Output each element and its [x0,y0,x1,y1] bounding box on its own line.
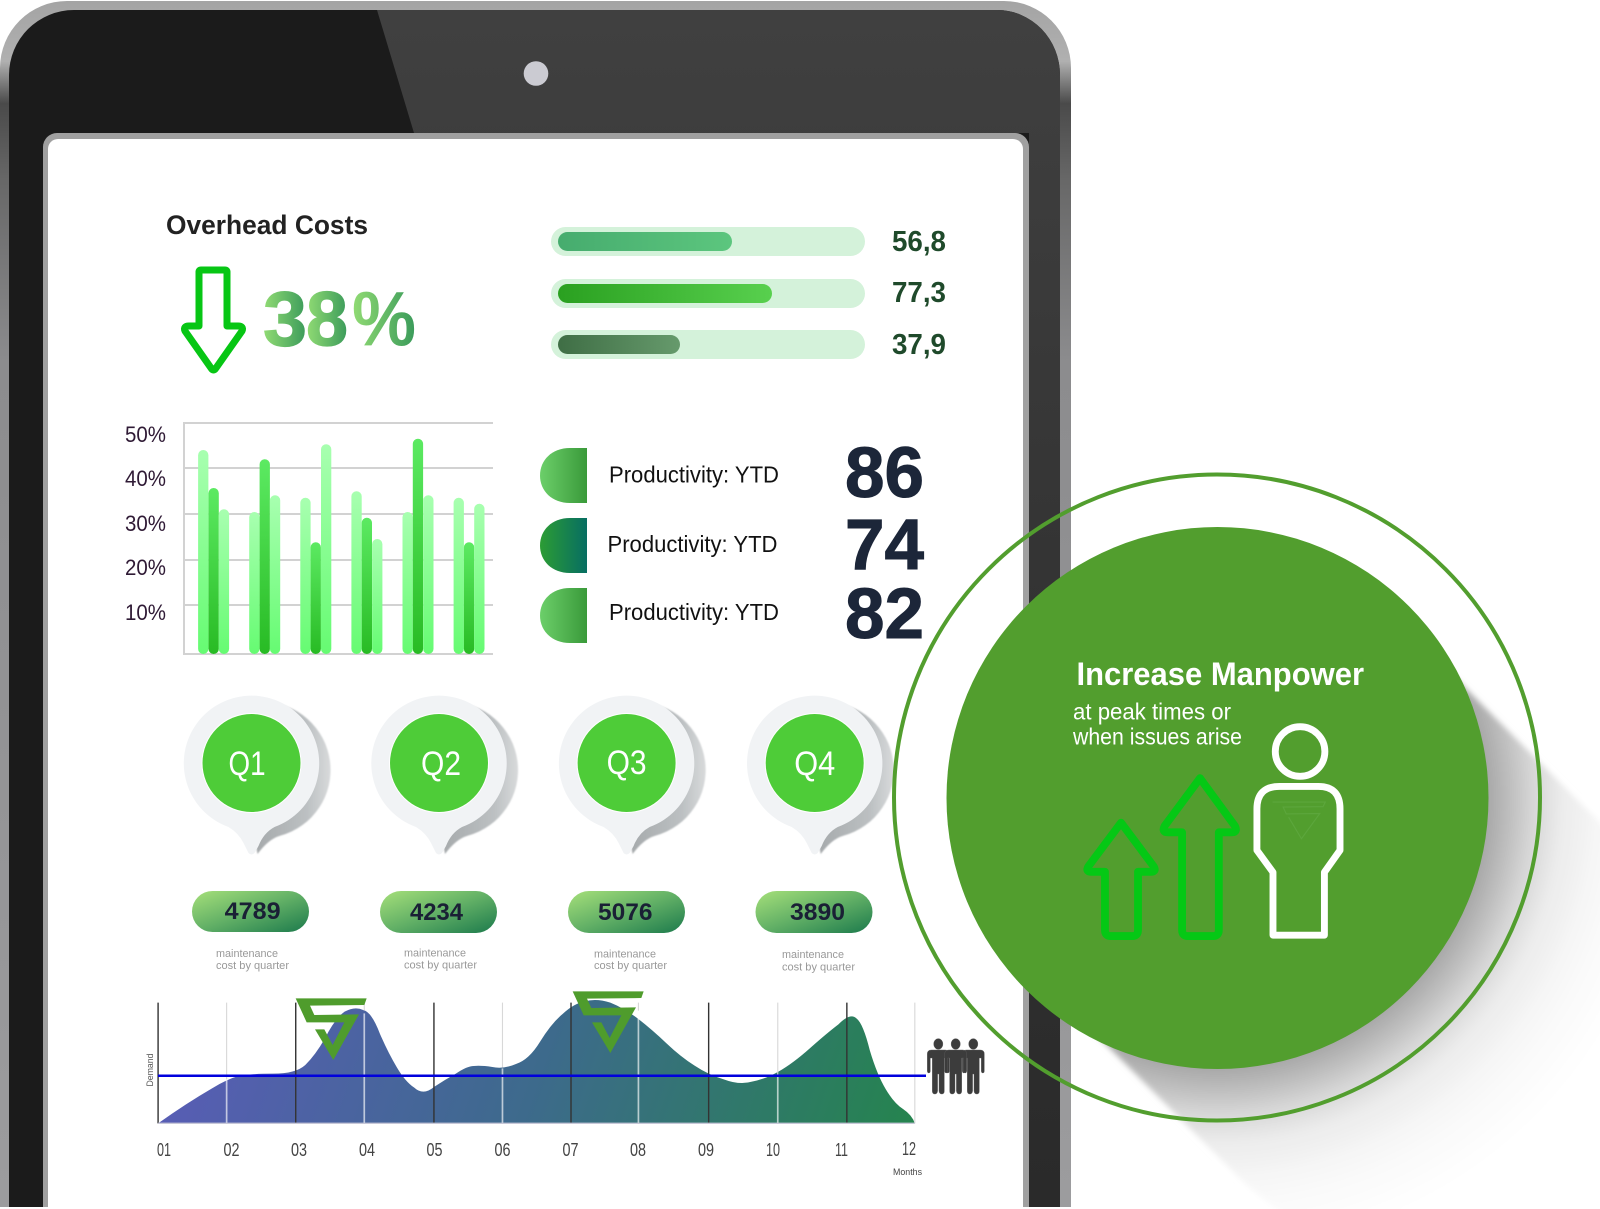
productivity row 1: Productivity: YTD [609,462,779,488]
pin: Q1: Q1 [228,745,266,783]
bars [198,439,484,654]
axis title: Demand: Demand [145,1054,155,1086]
bar 37,9: 37,9 [892,329,946,361]
productivity row 2: Productivity: YTD [608,531,778,557]
productivity row 1: 86 [845,434,924,513]
long shadow [1038,619,1600,1209]
green disc [946,527,1488,1069]
y axis labels: 30% [125,511,166,536]
tablet device [0,1,1071,1207]
person right [962,1039,984,1094]
x axis labels: 04 [359,1140,375,1160]
caption: Q2 maintenance [404,948,477,972]
x axis labels: 10 [766,1140,780,1160]
x axis labels: 11 [835,1140,848,1160]
pin: Q4 [747,696,894,854]
y axis labels [125,422,166,625]
icon: people [927,1039,984,1094]
pin: Q1 [184,696,331,854]
x axis labels: 08 [630,1140,646,1160]
callout body [1072,698,1242,750]
faint logo [1273,802,1325,839]
productivity row 3: Productivity: YTD [609,599,779,625]
pill: 4789: 4789 [225,898,281,925]
stat: 38%: 8 [306,276,348,362]
progress bars [551,226,946,361]
pill: 5076: 5076 [598,899,652,926]
pill: 3890: 3890 [790,899,845,926]
callout body: when issues arise [1072,724,1242,750]
caption: Q3 maintenance [594,948,667,972]
bar 77,3: 77,3 [892,277,946,309]
caption: Q1 maintenance: cost by quarter [216,960,289,972]
pin: Q2: Q2 [421,745,461,783]
pill: 5076 [568,891,685,933]
stat: 38%: 3 [263,276,307,362]
pin: Q3: Q3 [607,744,647,782]
y axis labels: 50% [125,422,166,447]
caption: Q2 maintenance: cost by quarter [404,960,477,972]
pin: Q4: Q4 [794,745,835,783]
pill: 4789 [192,891,309,932]
y axis labels: 40% [125,466,166,491]
large arrow [1164,778,1236,936]
bar 77,3 [551,277,946,309]
callout: Increase Manpower [894,474,1600,1209]
productivity list [540,434,925,654]
area chart: demand [145,1000,926,1178]
productivity row 3 [540,575,924,654]
caption: Q4 maintenance [782,949,855,974]
caption: Q2 maintenance: maintenance [404,948,466,960]
y axis labels: 20% [125,555,166,580]
productivity row 2 [540,506,925,585]
x axis labels: 02 [224,1140,240,1160]
x axis labels [157,1139,916,1160]
x axis labels: 01 [157,1140,171,1160]
screen [43,133,1029,1207]
x axis labels: 12 [902,1139,916,1159]
y axis labels: 10% [125,600,166,625]
caption: Q1 maintenance: maintenance [216,948,278,960]
x axis labels: 05 [426,1140,442,1160]
x axis labels: 07 [562,1140,578,1160]
person left [927,1039,949,1094]
pill: 3890 [756,891,872,933]
callout heading: Increase Manpower [1076,656,1364,692]
small arrow [1087,823,1155,936]
bar 56,8 [551,226,946,258]
icon: up arrows and person [1087,727,1340,936]
bar 56,8: 56,8 [892,226,946,258]
productivity row 3: 82 [845,575,924,654]
caption: Q4 maintenance: maintenance [782,949,844,961]
stat: 38% [263,276,416,362]
icon: down arrow [184,270,242,370]
x axis labels: 03 [291,1140,307,1160]
heading: Overhead Costs: Overhead Costs [166,210,368,240]
area [158,1000,915,1123]
callout body: at peak times or [1073,698,1231,724]
caption: Q4 maintenance: cost by quarter [782,962,855,974]
caption: Q3 maintenance: maintenance [594,948,656,960]
camera [524,61,548,86]
logo marker 2 [573,991,644,1053]
productivity row 1 [540,434,924,513]
axis title: Months: Months [893,1167,922,1178]
outer ring [894,474,1540,1120]
bar chart [125,422,493,655]
person middle [945,1039,967,1094]
bar 37,9 [551,329,946,361]
x axis labels: 06 [494,1140,510,1160]
person outline [1257,727,1340,935]
x axis labels: 09 [698,1140,714,1160]
pin: Q3 [559,696,706,854]
caption: Q3 maintenance: cost by quarter [594,960,667,972]
logo marker 1 [296,998,367,1060]
threshold line [158,1074,926,1077]
pin: Q2 [371,696,518,854]
productivity row 2: 74 [845,506,925,585]
caption: Q1 maintenance [216,948,289,972]
pill: 4234: 4234 [410,899,464,926]
pill: 4234 [380,891,497,933]
stat: 38%: % [352,276,416,362]
